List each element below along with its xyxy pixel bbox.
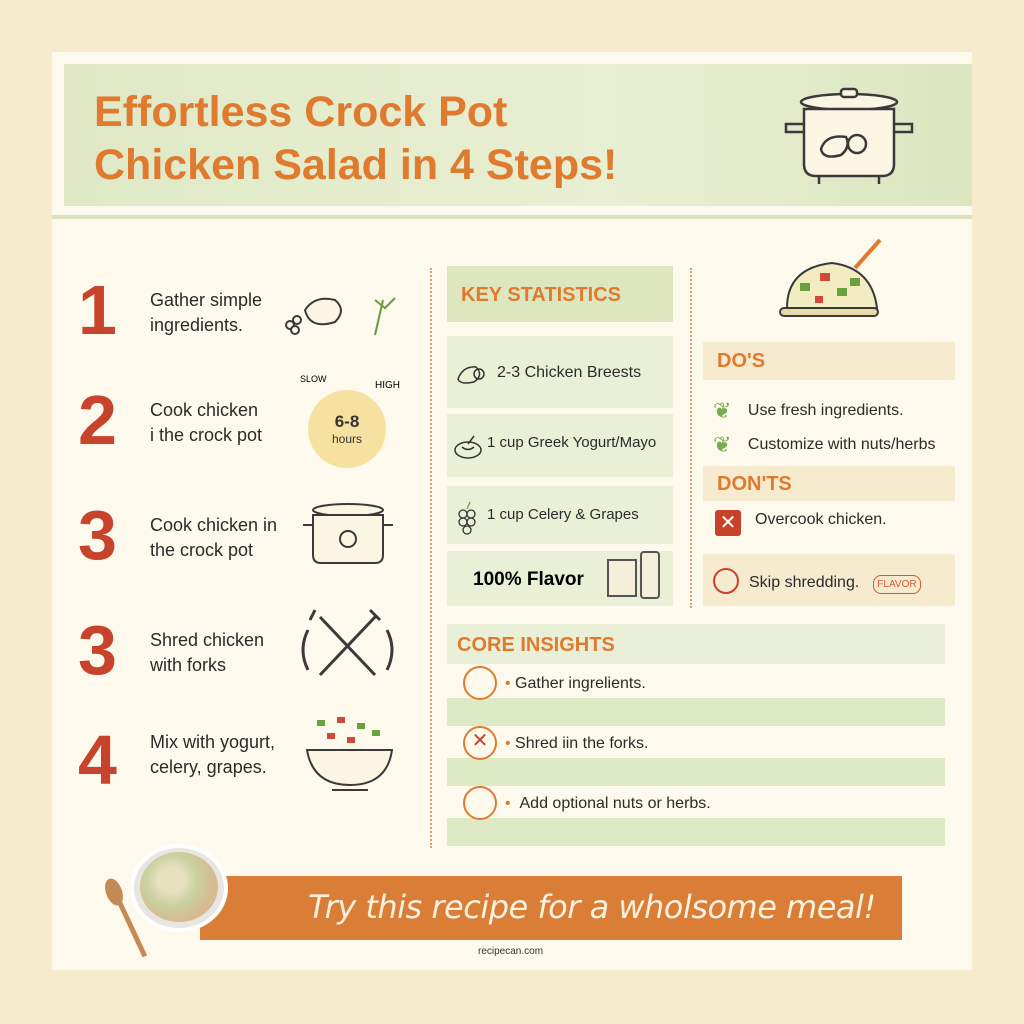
step 2 xyxy=(78,374,400,468)
source: recipecan.com xyxy=(478,946,543,957)
item xyxy=(715,510,887,536)
step 2: i the crock pot xyxy=(150,425,262,445)
step 1 xyxy=(78,271,396,349)
item xyxy=(703,554,955,606)
footer banner xyxy=(200,876,902,940)
panel: donts xyxy=(703,466,955,606)
step 2: 2 xyxy=(78,381,117,459)
text: SLOW xyxy=(300,374,327,384)
item 1: • Gather ingrelients. xyxy=(505,675,646,692)
item 2: • Shred iin the forks. xyxy=(505,735,648,752)
icon: crock pot header xyxy=(784,88,914,184)
item 2 xyxy=(463,726,648,760)
step 4 (3): Shred chicken xyxy=(150,630,264,650)
heading: KEY STATISTICS xyxy=(461,284,621,306)
step 3: the crock pot xyxy=(150,540,253,560)
item: ❦ Use fresh ingredients. xyxy=(713,398,904,423)
icon: salad bowl and spoon xyxy=(105,844,228,958)
stat 3 xyxy=(447,486,673,544)
step 4 (3): with forks xyxy=(150,655,226,675)
dotted dividers xyxy=(430,268,432,848)
title: Chicken Salad in 4 Steps! xyxy=(94,141,617,189)
heading: DON'TS xyxy=(717,473,792,495)
step 5 (4): Mix with yogurt, xyxy=(150,732,275,752)
step 3: 3 xyxy=(78,496,117,574)
icon: salad plate xyxy=(779,238,882,317)
item: ✕ xyxy=(720,512,736,534)
stat 3: 1 cup Celery & Grapes xyxy=(487,506,639,523)
heading xyxy=(447,624,945,664)
step 4 (3): 3 xyxy=(78,611,117,689)
stat 1: 2-3 Chicken Breests xyxy=(497,364,641,381)
step 1: Gather simple xyxy=(150,290,262,310)
item 3: • Add optional nuts or herbs. xyxy=(505,795,711,812)
icon: forks xyxy=(302,609,394,676)
item 2: ✕ xyxy=(472,730,488,752)
step 2: Cook chicken xyxy=(150,400,258,420)
step 1: ingredients. xyxy=(150,315,243,335)
stat 2 xyxy=(447,414,673,477)
panel: core insights xyxy=(447,624,945,846)
heading xyxy=(447,266,673,322)
panel: dos xyxy=(703,342,955,457)
item: ❦ Customize with nuts/herbs xyxy=(713,432,936,457)
step 3 xyxy=(78,496,393,574)
footer banner: Try this recipe for a wholsome meal! xyxy=(308,888,876,926)
step 5 (4): 4 xyxy=(78,721,117,799)
step 5 (4): celery, grapes. xyxy=(150,757,267,777)
stat 4 xyxy=(447,551,673,606)
icon: ingredients xyxy=(285,297,396,336)
title: Effortless Crock Pot xyxy=(94,88,507,136)
icon: bowl xyxy=(306,717,394,791)
stat 4: 100% Flavor xyxy=(473,569,584,590)
panel: key statistics xyxy=(447,266,673,606)
stat 2: 1 cup Greek Yogurt/Mayo xyxy=(487,434,656,451)
step 1: 1 xyxy=(78,271,117,349)
icon: timer: hours xyxy=(332,432,362,446)
icon: timer: 6-8 xyxy=(335,412,359,431)
stat 1 xyxy=(447,336,673,408)
item: Skip shredding. FLAVOR xyxy=(749,574,917,591)
heading: DO'S xyxy=(717,350,765,372)
item 1 xyxy=(463,666,646,700)
icon: crock pot xyxy=(303,503,393,564)
step 2: HIGH xyxy=(375,380,400,391)
divider line xyxy=(52,215,972,219)
item: Overcook chicken. xyxy=(755,511,887,528)
heading xyxy=(703,466,955,501)
step 5 (4) xyxy=(78,717,394,799)
title xyxy=(94,88,617,189)
icon: timer xyxy=(308,390,386,468)
header banner xyxy=(64,64,972,206)
item 3 xyxy=(463,786,711,820)
step 3: Cook chicken in xyxy=(150,515,277,535)
heading: CORE INSIGHTS xyxy=(457,634,615,656)
heading xyxy=(703,342,955,380)
step 4 (3) xyxy=(78,609,394,689)
